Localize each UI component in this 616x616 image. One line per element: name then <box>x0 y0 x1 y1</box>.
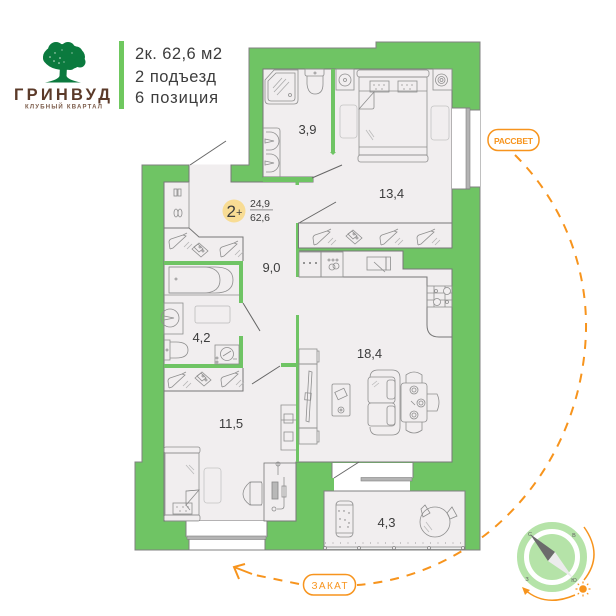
toilet <box>305 69 324 76</box>
room areas: 4,3 <box>377 515 396 530</box>
bottom window <box>186 521 267 550</box>
entrance opening <box>190 163 230 167</box>
apartment info text <box>135 45 222 107</box>
doors <box>243 165 359 478</box>
tv stand <box>299 349 319 444</box>
round table and chairs <box>420 505 457 537</box>
icon: tree <box>43 42 86 82</box>
entrance door <box>190 141 226 165</box>
sofa <box>368 370 400 435</box>
badge: 2+ area: 2 <box>226 202 236 221</box>
logo wordmark: ГРИНВУД <box>14 86 110 104</box>
balcony <box>324 491 465 550</box>
bathroom 4,2 fixtures <box>161 267 240 364</box>
compass letters <box>525 532 577 584</box>
lounger <box>336 501 353 537</box>
exterior green walls <box>135 42 480 550</box>
room areas: 3,9 <box>298 122 317 137</box>
label: ЗАКАТ <box>304 574 356 595</box>
kitchen units <box>299 252 452 337</box>
apartment info text: 6 позиция <box>135 89 218 107</box>
badge: 2+ area: 62,6 <box>250 212 270 224</box>
label: РАССВЕТ: РАССВЕТ <box>494 136 534 146</box>
toilet <box>164 340 188 360</box>
icon: sun <box>576 582 590 596</box>
bathtub <box>164 294 240 296</box>
apartment info text: 2 подъезд <box>135 68 216 86</box>
sink <box>164 303 183 334</box>
double bed <box>357 70 429 77</box>
washing machine <box>215 345 239 364</box>
hall wardrobe <box>164 228 243 261</box>
needle <box>530 534 555 561</box>
badge: 2+ area: 24,9 <box>250 198 270 210</box>
compass letters: Ю <box>571 578 577 584</box>
bedroom 11,5 furniture <box>164 405 296 521</box>
single bed <box>164 447 200 453</box>
rug <box>204 468 221 503</box>
coffee table <box>332 384 350 416</box>
label: РАССВЕТ <box>488 130 539 150</box>
bedroom wardrobe <box>298 223 452 248</box>
floor plan <box>135 42 480 550</box>
sun arc <box>524 527 594 600</box>
room areas <box>192 122 404 530</box>
dining table <box>401 372 439 433</box>
nightstands <box>336 69 354 90</box>
compass <box>520 526 594 600</box>
desk <box>264 463 296 521</box>
bedside rugs <box>340 105 357 138</box>
apartment info text: 2к. 62,6 м2 <box>135 45 222 63</box>
interior walls <box>164 69 336 462</box>
logo: Гринвуд <box>14 42 110 110</box>
hob <box>427 286 452 307</box>
room areas: 18,4 <box>357 346 382 361</box>
balcony railing <box>324 543 464 550</box>
compass letters: З <box>525 577 529 583</box>
shoe niche <box>164 182 189 228</box>
badge: 2+ area: + <box>236 207 242 219</box>
room areas: 11,5 <box>219 416 243 431</box>
bathroom 3,9 fixtures <box>263 69 324 177</box>
room areas: 4,2 <box>192 330 211 345</box>
lower wardrobe <box>164 368 244 391</box>
room areas: 13,4 <box>379 186 404 201</box>
room areas: 9,0 <box>262 260 281 275</box>
compass letters: С <box>528 532 532 538</box>
logo tagline: КЛУБНЫЙ КВАРТАЛ <box>25 102 102 110</box>
double sink <box>263 128 280 177</box>
bedroom furniture <box>336 69 452 162</box>
shelf <box>281 405 296 450</box>
badge: 2+ area <box>222 198 273 224</box>
arrow: sun path <box>234 155 586 585</box>
shower <box>265 70 298 104</box>
bath mat <box>195 306 230 323</box>
sink <box>367 257 386 270</box>
balcony window <box>332 462 413 491</box>
label: ЗАКАТ: ЗАКАТ <box>312 581 348 592</box>
right window <box>452 108 480 189</box>
office chair <box>243 482 262 505</box>
floor <box>164 69 452 521</box>
compass letters: В <box>572 533 576 539</box>
divider bar <box>119 41 124 109</box>
